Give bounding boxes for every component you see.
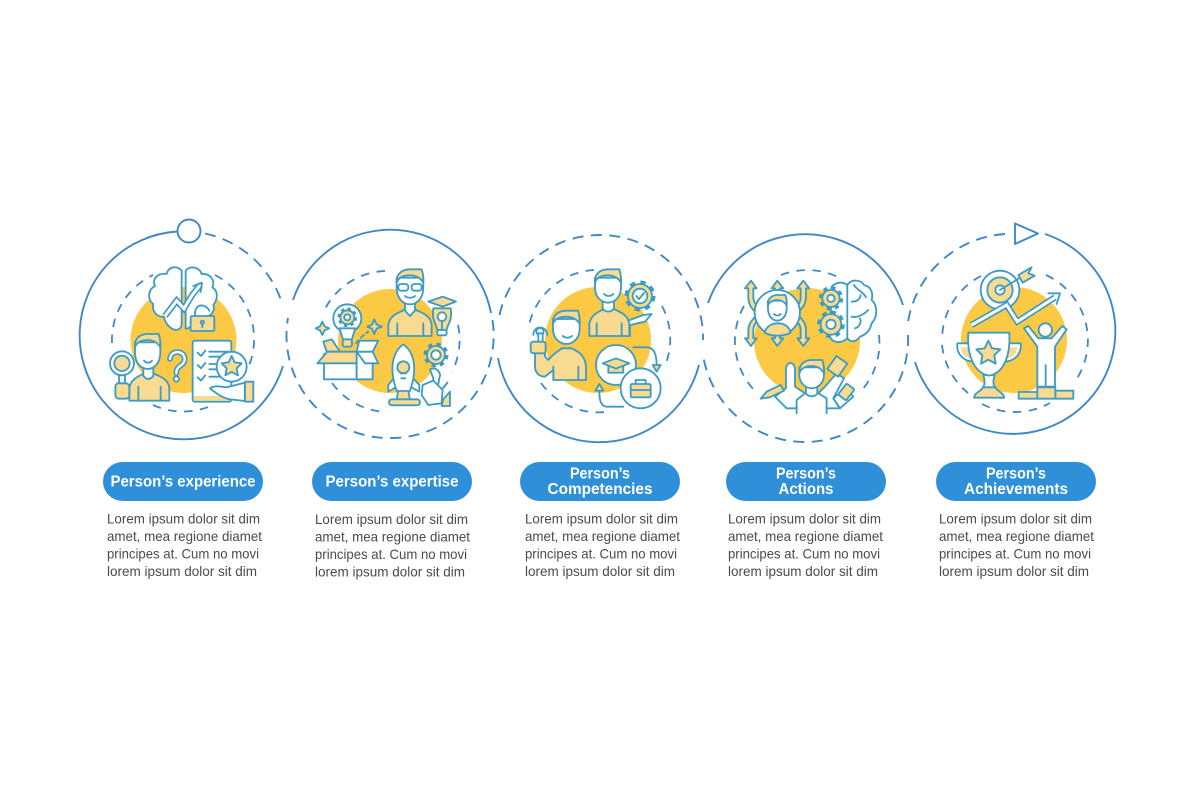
icon: winner on podium [1019, 323, 1073, 399]
body text: principes at. Cum no movi [107, 546, 259, 562]
icon: target with arrow [981, 267, 1035, 309]
body text: amet, mea regione diamet [939, 529, 1094, 544]
body text: lorem ipsum dolor sit dim [525, 564, 675, 579]
icon: branching arrows around person [745, 281, 809, 346]
panel: person's experience [80, 220, 283, 579]
icon: brain [149, 267, 217, 330]
body text: lorem ipsum dolor sit dim [315, 564, 465, 580]
pill heading: Person’s [986, 466, 1046, 482]
body text: amet, mea regione diamet [107, 529, 262, 544]
pill heading: Person’s expertise [326, 474, 459, 490]
body text [525, 512, 680, 579]
body text: Lorem ipsum dolor sit dim [728, 512, 881, 526]
panel: person's competencies [498, 235, 703, 579]
inner dashed ring [529, 270, 670, 412]
pill heading [936, 462, 1096, 501]
body text: Lorem ipsum dolor sit dim [107, 512, 260, 526]
panel: person's actions [703, 234, 908, 579]
pill heading: Competencies [548, 481, 652, 498]
body text: principes at. Cum no movi [939, 546, 1091, 562]
body text [315, 512, 470, 580]
pill heading [103, 462, 263, 501]
icon: box, bulb, person, rocket [316, 269, 456, 406]
body text: Lorem ipsum dolor sit dim [939, 512, 1092, 526]
pill heading [520, 462, 680, 501]
body text: principes at. Cum no movi [525, 546, 677, 562]
body text: amet, mea regione diamet [525, 529, 680, 544]
body text: lorem ipsum dolor sit dim [939, 564, 1089, 579]
icon: briefcase badge [621, 368, 661, 408]
icon: target, growth, trophy, winner [957, 267, 1073, 399]
icon: two people and career badges [531, 269, 661, 408]
yellow disc [754, 288, 860, 394]
body text: Lorem ipsum dolor sit dim [315, 512, 468, 527]
icon: growth arrow [972, 293, 1060, 325]
icon: graduation bulb [428, 297, 456, 335]
icon: open box with bulb [316, 304, 382, 379]
outer ring [703, 234, 908, 442]
pill heading: Person’s [570, 466, 630, 482]
outer ring with start marker [80, 220, 283, 439]
icon: top person with gear [589, 269, 653, 336]
pill heading [312, 462, 472, 501]
icon: curved arrows [595, 347, 661, 407]
body text: lorem ipsum dolor sit dim [728, 564, 878, 579]
icon: question mark [170, 352, 185, 382]
icon: brain, person, checklist [110, 267, 253, 402]
outer ring [498, 235, 703, 442]
pill heading: Person’s [776, 466, 836, 482]
body text [939, 512, 1094, 579]
pill heading [726, 462, 886, 501]
body text: Lorem ipsum dolor sit dim [525, 512, 678, 526]
icon: multitasking person [761, 356, 855, 413]
pill heading: Actions [778, 481, 834, 498]
yellow disc [130, 287, 236, 393]
yellow disc [545, 287, 651, 393]
body text: amet, mea regione diamet [315, 530, 470, 544]
yellow disc [338, 289, 442, 393]
inner dashed ring [942, 275, 1088, 412]
icon: rocket [388, 344, 420, 405]
inner dashed ring [735, 270, 879, 392]
body text [728, 512, 883, 579]
icon: left person pointing [531, 311, 586, 380]
icon: trophy [957, 333, 1021, 398]
icon: checklist with star and hand [193, 341, 253, 402]
body text [107, 512, 262, 579]
outer ring with end marker [908, 224, 1115, 434]
icon: person with glasses [388, 269, 432, 336]
icon: graduation cap badge [596, 345, 636, 385]
body text: lorem ipsum dolor sit dim [107, 564, 257, 579]
icon: padlock [191, 305, 214, 331]
icon: person with magnifier [110, 334, 169, 401]
pill heading: Person’s experience [110, 474, 256, 490]
inner dashed ring [323, 271, 460, 412]
body text: amet, mea regione diamet [728, 529, 883, 544]
body text: principes at. Cum no movi [315, 547, 467, 562]
panel: person's expertise [286, 230, 494, 580]
icon: person, arrows, brain, multitasking [745, 281, 876, 413]
icon: gears and brain [819, 281, 876, 342]
pill heading: Achievements [964, 481, 1068, 498]
icon: gear, wrench and fist [422, 345, 450, 406]
outer ring [286, 230, 494, 438]
yellow disc [961, 287, 1067, 393]
panel: person's achievements [908, 224, 1115, 579]
inner dashed ring [112, 275, 254, 412]
body text: principes at. Cum no movi [728, 546, 880, 562]
